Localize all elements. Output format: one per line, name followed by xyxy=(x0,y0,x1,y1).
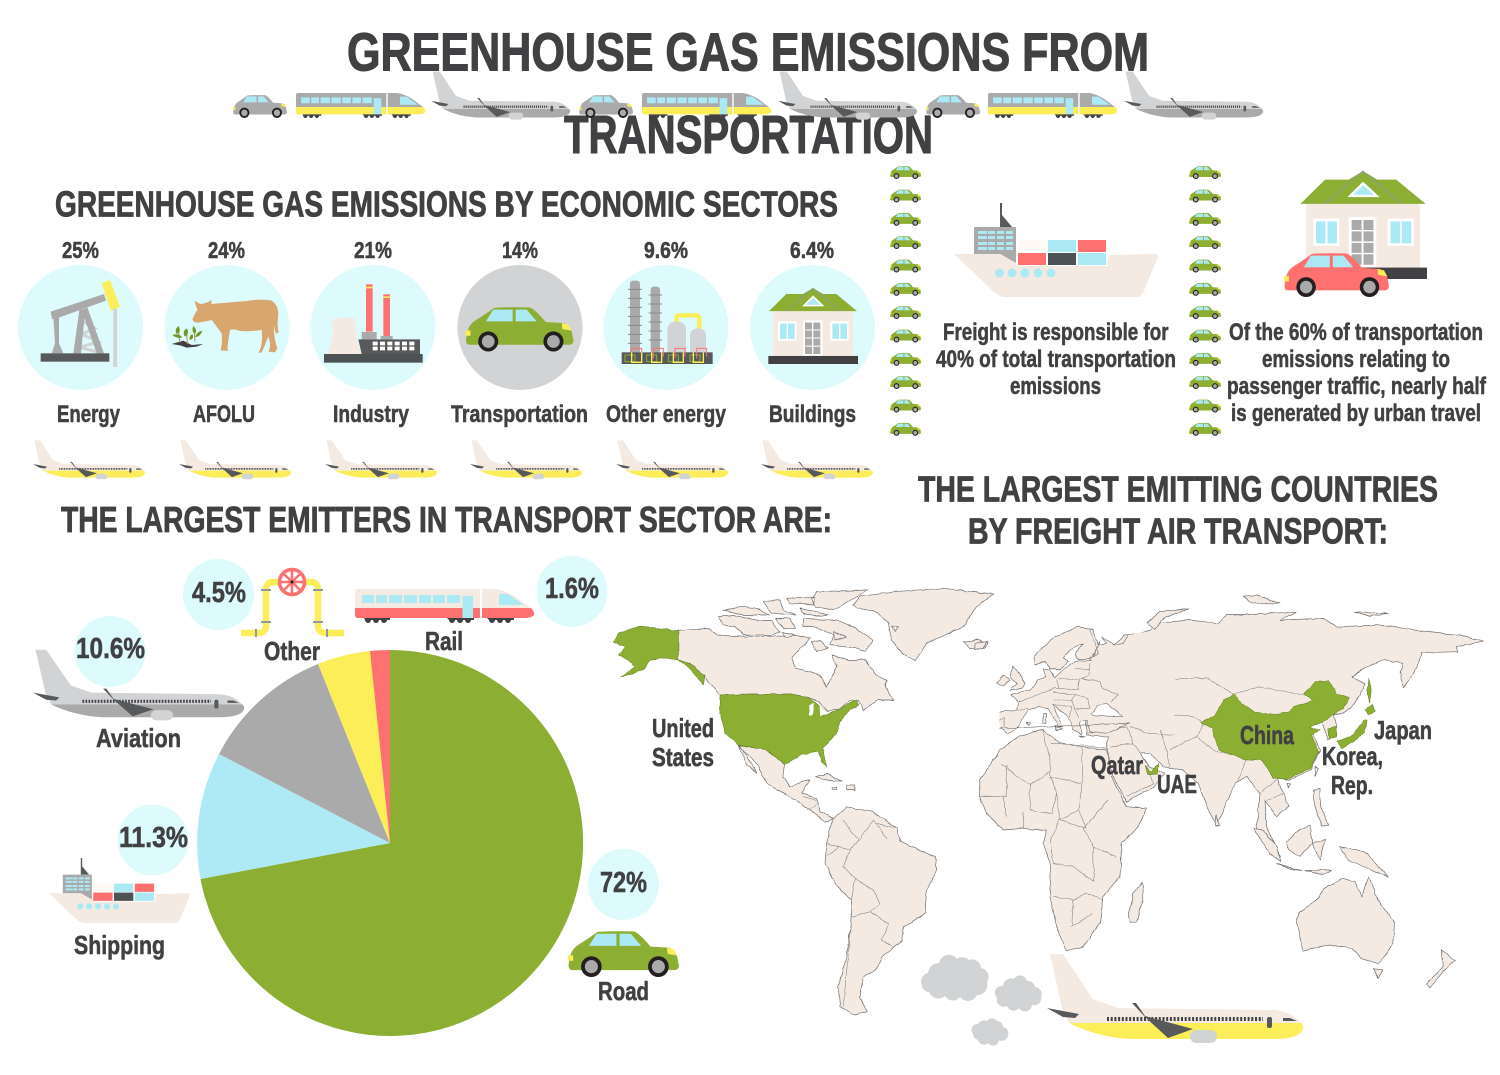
sector labels: Energy xyxy=(57,401,120,428)
sector circles xyxy=(18,265,875,390)
icon: large plane xyxy=(1047,954,1303,1043)
map: China Korea Japan xyxy=(1201,678,1376,778)
sector percentages: 9.6% xyxy=(644,237,688,263)
map labels: Korea, xyxy=(1322,741,1383,771)
map labels xyxy=(652,713,1432,800)
map labels: Rep. xyxy=(1331,770,1373,800)
title xyxy=(347,22,1149,165)
icon: cow and plants xyxy=(172,300,279,353)
map labels: China xyxy=(1240,720,1294,750)
icon: road car xyxy=(568,931,679,977)
pie values and labels: Rail xyxy=(425,626,463,656)
map: Americas xyxy=(613,588,993,1015)
pie chart xyxy=(197,650,583,1036)
passenger text xyxy=(1227,319,1487,427)
icon: factory xyxy=(324,284,423,363)
icon: house with red car xyxy=(1284,171,1427,297)
sector labels: AFOLU xyxy=(193,401,255,428)
passenger text: emissions relating to xyxy=(1262,346,1450,373)
map labels: United xyxy=(652,713,714,743)
icon: refinery xyxy=(622,281,713,364)
freight text: Freight is responsible for xyxy=(943,319,1168,346)
sector labels xyxy=(57,401,856,428)
sector percentages: 6.4% xyxy=(790,237,834,263)
map: Europe xyxy=(975,627,1175,737)
sector percentages: 25% xyxy=(62,237,99,263)
icon: aviation plane xyxy=(33,650,244,720)
icon: oil pump xyxy=(41,280,120,367)
freight text xyxy=(936,319,1176,400)
icon: pipe valve xyxy=(241,569,344,637)
sector labels: Other energy xyxy=(606,401,727,428)
row of planes xyxy=(33,440,873,479)
map: Canadian Arctic islands xyxy=(718,590,898,652)
pie values and labels xyxy=(74,573,649,1006)
sector percentages: 21% xyxy=(354,237,392,263)
panel: freight xyxy=(936,203,1176,400)
sector labels: Buildings xyxy=(769,401,856,428)
map labels: States xyxy=(652,742,714,772)
map labels: UAE xyxy=(1157,769,1197,799)
panel: passenger traffic xyxy=(1227,171,1487,427)
pie values and labels: Other xyxy=(264,636,320,666)
icon: exhaust clouds xyxy=(921,955,1042,1046)
heading: economic sectors: GREENHOUSE GAS EMISSIONS BY ECONOMIC SECTORS xyxy=(55,184,838,224)
column of small green cars 2 xyxy=(1189,166,1221,436)
sector labels: Industry xyxy=(333,401,410,428)
title: GREENHOUSE GAS EMISSIONS FROM xyxy=(347,22,1149,82)
heading: emitting countries: BY FREIGHT AIR TRANSPORT: xyxy=(968,510,1388,552)
sector percentages: 14% xyxy=(502,237,538,263)
freight text: emissions xyxy=(1010,373,1101,400)
panel: economic sectors xyxy=(18,237,875,479)
pie values and labels: Shipping xyxy=(74,930,165,960)
bubbles: pie percentages xyxy=(74,556,659,920)
column of small green cars 1 xyxy=(890,166,921,436)
icon: house xyxy=(768,288,858,364)
world map xyxy=(613,588,1483,1015)
heading: emitting countries xyxy=(918,468,1438,552)
map: Africa and Asia xyxy=(979,595,1483,987)
heading: transport sector emitters: THE LARGEST EMITTERS IN TRANSPORT SECTOR ARE: xyxy=(61,499,832,540)
icon: rail train xyxy=(355,589,534,623)
sector percentages: 24% xyxy=(208,237,245,263)
pie values and labels: 72% xyxy=(600,867,647,899)
icon: cargo ship xyxy=(954,203,1158,297)
pie values and labels: 11.3% xyxy=(119,822,188,854)
pie values and labels: Road xyxy=(598,976,649,1006)
pie values and labels: Aviation xyxy=(96,723,181,753)
icon: green car xyxy=(466,307,574,352)
sector labels: Transportation xyxy=(451,401,588,428)
sector percentages xyxy=(62,237,834,263)
vehicle strip under title xyxy=(233,72,1263,120)
title: TRANSPORTATION xyxy=(564,105,933,165)
pie values and labels: 1.6% xyxy=(545,573,599,605)
pie values and labels: 10.6% xyxy=(76,633,145,665)
map labels: Qatar xyxy=(1091,750,1143,780)
freight text: 40% of total transportation xyxy=(936,346,1176,373)
icon: shipping ship xyxy=(49,858,190,923)
pie values and labels: 4.5% xyxy=(192,577,246,609)
map labels: Japan xyxy=(1374,715,1432,745)
